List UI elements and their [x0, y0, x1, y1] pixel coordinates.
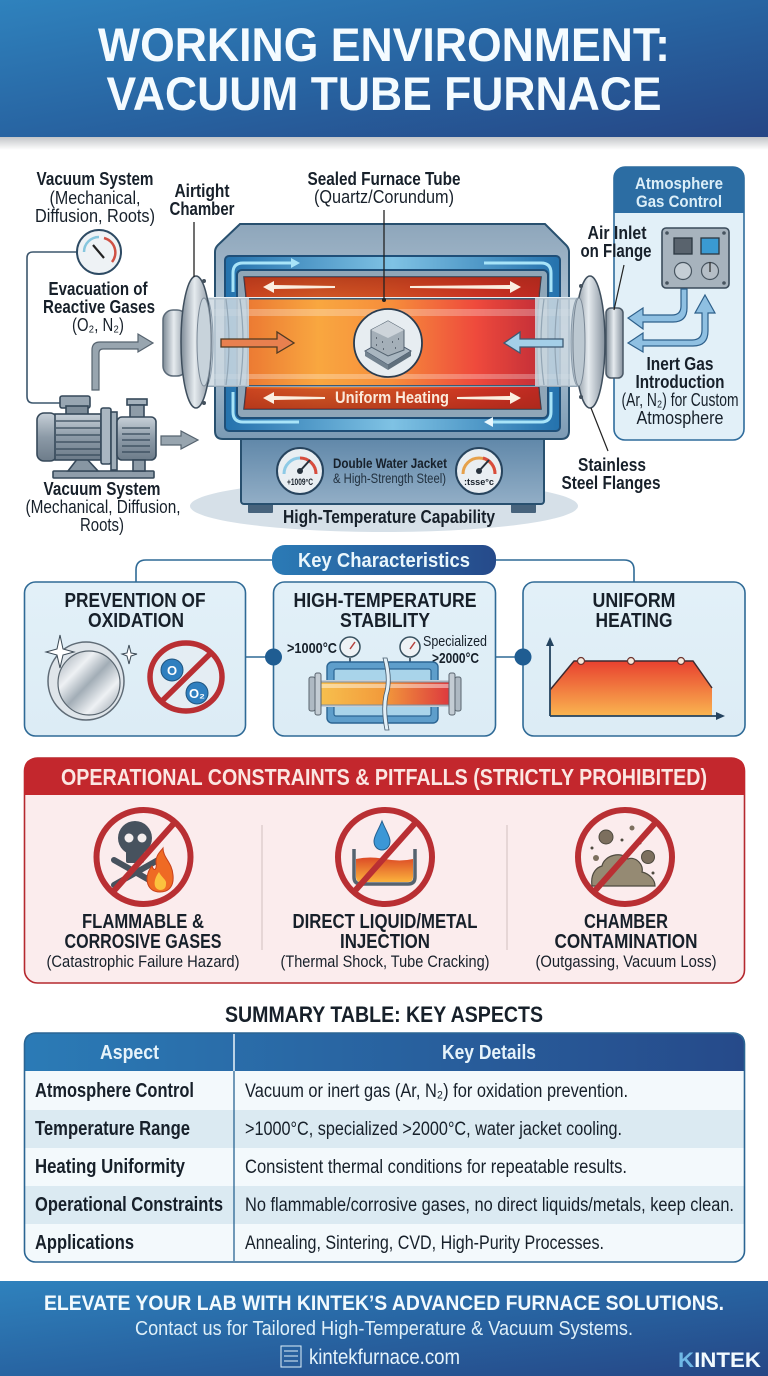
- card: high-temperature stability: Specialized: [423, 633, 487, 650]
- cooling water flow lines: [233, 258, 551, 427]
- row: temperature range: [35, 1118, 622, 1140]
- label: sealed furnace tube: [308, 169, 460, 302]
- label: vacuum system top: Vacuum System: [36, 169, 154, 189]
- label: stainless steel flanges: Steel Flanges: [562, 473, 660, 493]
- icon: vacuum gauge: [77, 230, 121, 274]
- label: vacuum system bottom: Vacuum System: [44, 479, 160, 499]
- label: inert gas introduction: [622, 354, 738, 428]
- label: air inlet on flange: Air Inlet: [588, 223, 646, 243]
- header banner: [0, 0, 768, 150]
- label: inert gas introduction: Introduction: [636, 372, 724, 392]
- row: operational constraints: Operational Constraints: [35, 1194, 223, 1216]
- arrow: pump outflow: [161, 431, 198, 449]
- sample holder icon: [354, 309, 422, 377]
- section: key characteristics: [24, 545, 745, 736]
- furnace body: [215, 224, 569, 439]
- card: prevention of oxidation: OXIDATION: [88, 610, 184, 632]
- tube outflow arrow: [504, 332, 563, 353]
- flammable caption: FLAMMABLE &: [82, 911, 204, 933]
- label: airtight chamber: Chamber: [170, 199, 234, 219]
- title: VACUUM TUBE FURNACE: [106, 67, 662, 120]
- heat spread arrows: [263, 281, 521, 404]
- footer: [0, 1281, 768, 1376]
- water jacket label: Double Water Jacket: [333, 455, 447, 471]
- water jacket label: [333, 455, 447, 486]
- key characteristics pill: Key Characteristics: [298, 550, 470, 572]
- icon: no direct liquid injection: [338, 810, 432, 904]
- flammable caption: (Catastrophic Failure Hazard): [46, 952, 240, 971]
- row: heating uniformity: Heating Uniformity: [35, 1156, 186, 1178]
- row: heating uniformity: [35, 1156, 627, 1178]
- label: vacuum system top: Diffusion, Roots): [35, 206, 155, 226]
- label: stainless steel flanges: [562, 408, 660, 493]
- icon: no flammable gases: [96, 810, 190, 904]
- row: atmosphere control: Atmosphere Control: [35, 1080, 194, 1102]
- furnace base: [241, 436, 544, 513]
- high-temperature capability label: High-Temperature Capability: [283, 507, 495, 527]
- table header row: Key Details: [442, 1042, 536, 1064]
- icon: no oxygen: O₂: [189, 686, 205, 701]
- row: applications: [35, 1232, 604, 1254]
- row: applications: Annealing, Sintering, CVD, High-Purity Processes.: [245, 1233, 604, 1254]
- summary table: [24, 1033, 745, 1262]
- right flange: [573, 276, 623, 408]
- chart: temperature profile: [546, 637, 725, 720]
- contamination caption: CHAMBER: [584, 911, 668, 933]
- vacuum hose: [27, 252, 78, 403]
- contamination caption: [536, 911, 716, 971]
- right temperature gauge: :tsse°c: [464, 477, 494, 487]
- card: uniform heating: UNIFORM: [592, 590, 676, 612]
- icon: no contamination: [578, 810, 672, 904]
- card: high-temperature stability: STABILITY: [340, 610, 431, 632]
- panel: atmosphere gas control: [614, 167, 744, 440]
- row: temperature range: Temperature Range: [35, 1118, 190, 1140]
- label: evacuation of reactive gases: (O₂, N₂): [72, 315, 124, 335]
- left temperature gauge: [277, 448, 323, 494]
- card: high-temperature stability: HIGH-TEMPERATURE: [294, 590, 476, 612]
- row: atmosphere control: [35, 1080, 628, 1102]
- sealed furnace tube: [199, 298, 585, 386]
- liquid caption: DIRECT LIQUID/METAL: [292, 911, 478, 933]
- kintek logo: KINTEK: [678, 1349, 761, 1372]
- liquid caption: INJECTION: [340, 931, 430, 953]
- liquid caption: (Thermal Shock, Tube Cracking): [280, 952, 490, 971]
- row: heating uniformity: Consistent thermal conditions for repeatable results.: [245, 1157, 627, 1178]
- contamination caption: (Outgassing, Vacuum Loss): [536, 952, 716, 971]
- footer subline: Contact us for Tailored High-Temperature & Vacuum Systems.: [135, 1318, 633, 1340]
- label: vacuum system bottom: Roots): [80, 515, 124, 535]
- left temperature gauge: +1009°C: [287, 477, 313, 487]
- card: prevention of oxidation: [24, 582, 246, 736]
- website url: kintekfurnace.com: [309, 1346, 460, 1369]
- card: high-temperature stability: [265, 582, 496, 736]
- contamination caption: CONTAMINATION: [554, 931, 698, 953]
- title: [98, 18, 670, 120]
- icon: no oxygen: O: [167, 663, 177, 678]
- card: high-temperature stability: >1000°C: [287, 640, 337, 657]
- card: uniform heating: HEATING: [596, 610, 672, 632]
- table header row: Aspect: [100, 1042, 159, 1064]
- label: inert gas introduction: Atmosphere: [636, 408, 724, 428]
- summary table heading: SUMMARY TABLE: KEY ASPECTS: [225, 1002, 543, 1027]
- uniform heating label: Uniform Heating: [335, 388, 449, 407]
- icon: polished metal disc: [46, 635, 137, 720]
- right temperature gauge: [456, 448, 502, 494]
- row: applications: Applications: [35, 1232, 134, 1254]
- label: sealed furnace tube: (Quartz/Corundum): [314, 187, 454, 207]
- card: high-temperature stability: >2000°C: [432, 650, 479, 667]
- icon: control panel: [662, 228, 729, 288]
- label: air inlet on flange: [580, 223, 652, 310]
- icon: no oxygen: [150, 643, 222, 711]
- label: evacuation of reactive gases: [43, 279, 155, 335]
- panel: atmosphere gas control: Gas Control: [636, 192, 722, 211]
- tube inflow arrow: [221, 332, 294, 353]
- label: stainless steel flanges: Stainless: [578, 455, 646, 475]
- icon: mini furnace: [309, 637, 461, 730]
- label: airtight chamber: [170, 181, 234, 277]
- liquid caption: [280, 911, 490, 971]
- row: temperature range: >1000°C, specialized >2000°C, water jacket cooling.: [245, 1119, 622, 1140]
- label: vacuum system bottom: [26, 479, 180, 535]
- floor shadow: [190, 480, 578, 532]
- panel: operational constraints: [24, 758, 745, 983]
- label: sealed furnace tube: Sealed Furnace Tube: [308, 169, 460, 189]
- label: evacuation of reactive gases: Reactive Gases: [43, 297, 155, 317]
- diagram: vacuum tube furnace: [26, 167, 744, 535]
- label: vacuum system top: [35, 169, 155, 226]
- flammable caption: CORROSIVE GASES: [64, 931, 222, 953]
- left flange: [163, 276, 211, 408]
- flammable caption: [46, 911, 240, 971]
- title: WORKING ENVIRONMENT:: [98, 18, 670, 71]
- gas lines: [628, 289, 715, 352]
- label: inert gas introduction: Inert Gas: [646, 354, 714, 374]
- table header row: [100, 1042, 536, 1064]
- heating chamber: [244, 277, 541, 409]
- label: vacuum system top: (Mechanical,: [50, 188, 140, 208]
- icon: website: [281, 1346, 301, 1367]
- connector lines: [136, 560, 634, 657]
- card: prevention of oxidation: PREVENTION OF: [64, 590, 206, 612]
- footer headline: ELEVATE YOUR LAB WITH KINTEK’S ADVANCED FURNACE SOLUTIONS.: [44, 1292, 724, 1315]
- icon: vacuum pump: [37, 396, 156, 478]
- arrow: pump to chamber: [92, 334, 153, 390]
- label: air inlet on flange: on Flange: [580, 241, 652, 261]
- row: operational constraints: [35, 1194, 734, 1216]
- label: airtight chamber: Airtight: [174, 181, 230, 201]
- card: uniform heating: [514, 582, 745, 736]
- key characteristics pill: [272, 545, 496, 575]
- label: vacuum system bottom: (Mechanical, Diffusion,: [26, 497, 180, 517]
- label: evacuation of reactive gases: Evacuation of: [48, 279, 148, 299]
- water jacket label: & High-Strength Steel): [333, 470, 446, 486]
- row: atmosphere control: Vacuum or inert gas (Ar, N₂) for oxidation prevention.: [245, 1081, 628, 1102]
- panel: atmosphere gas control: Atmosphere: [635, 174, 723, 193]
